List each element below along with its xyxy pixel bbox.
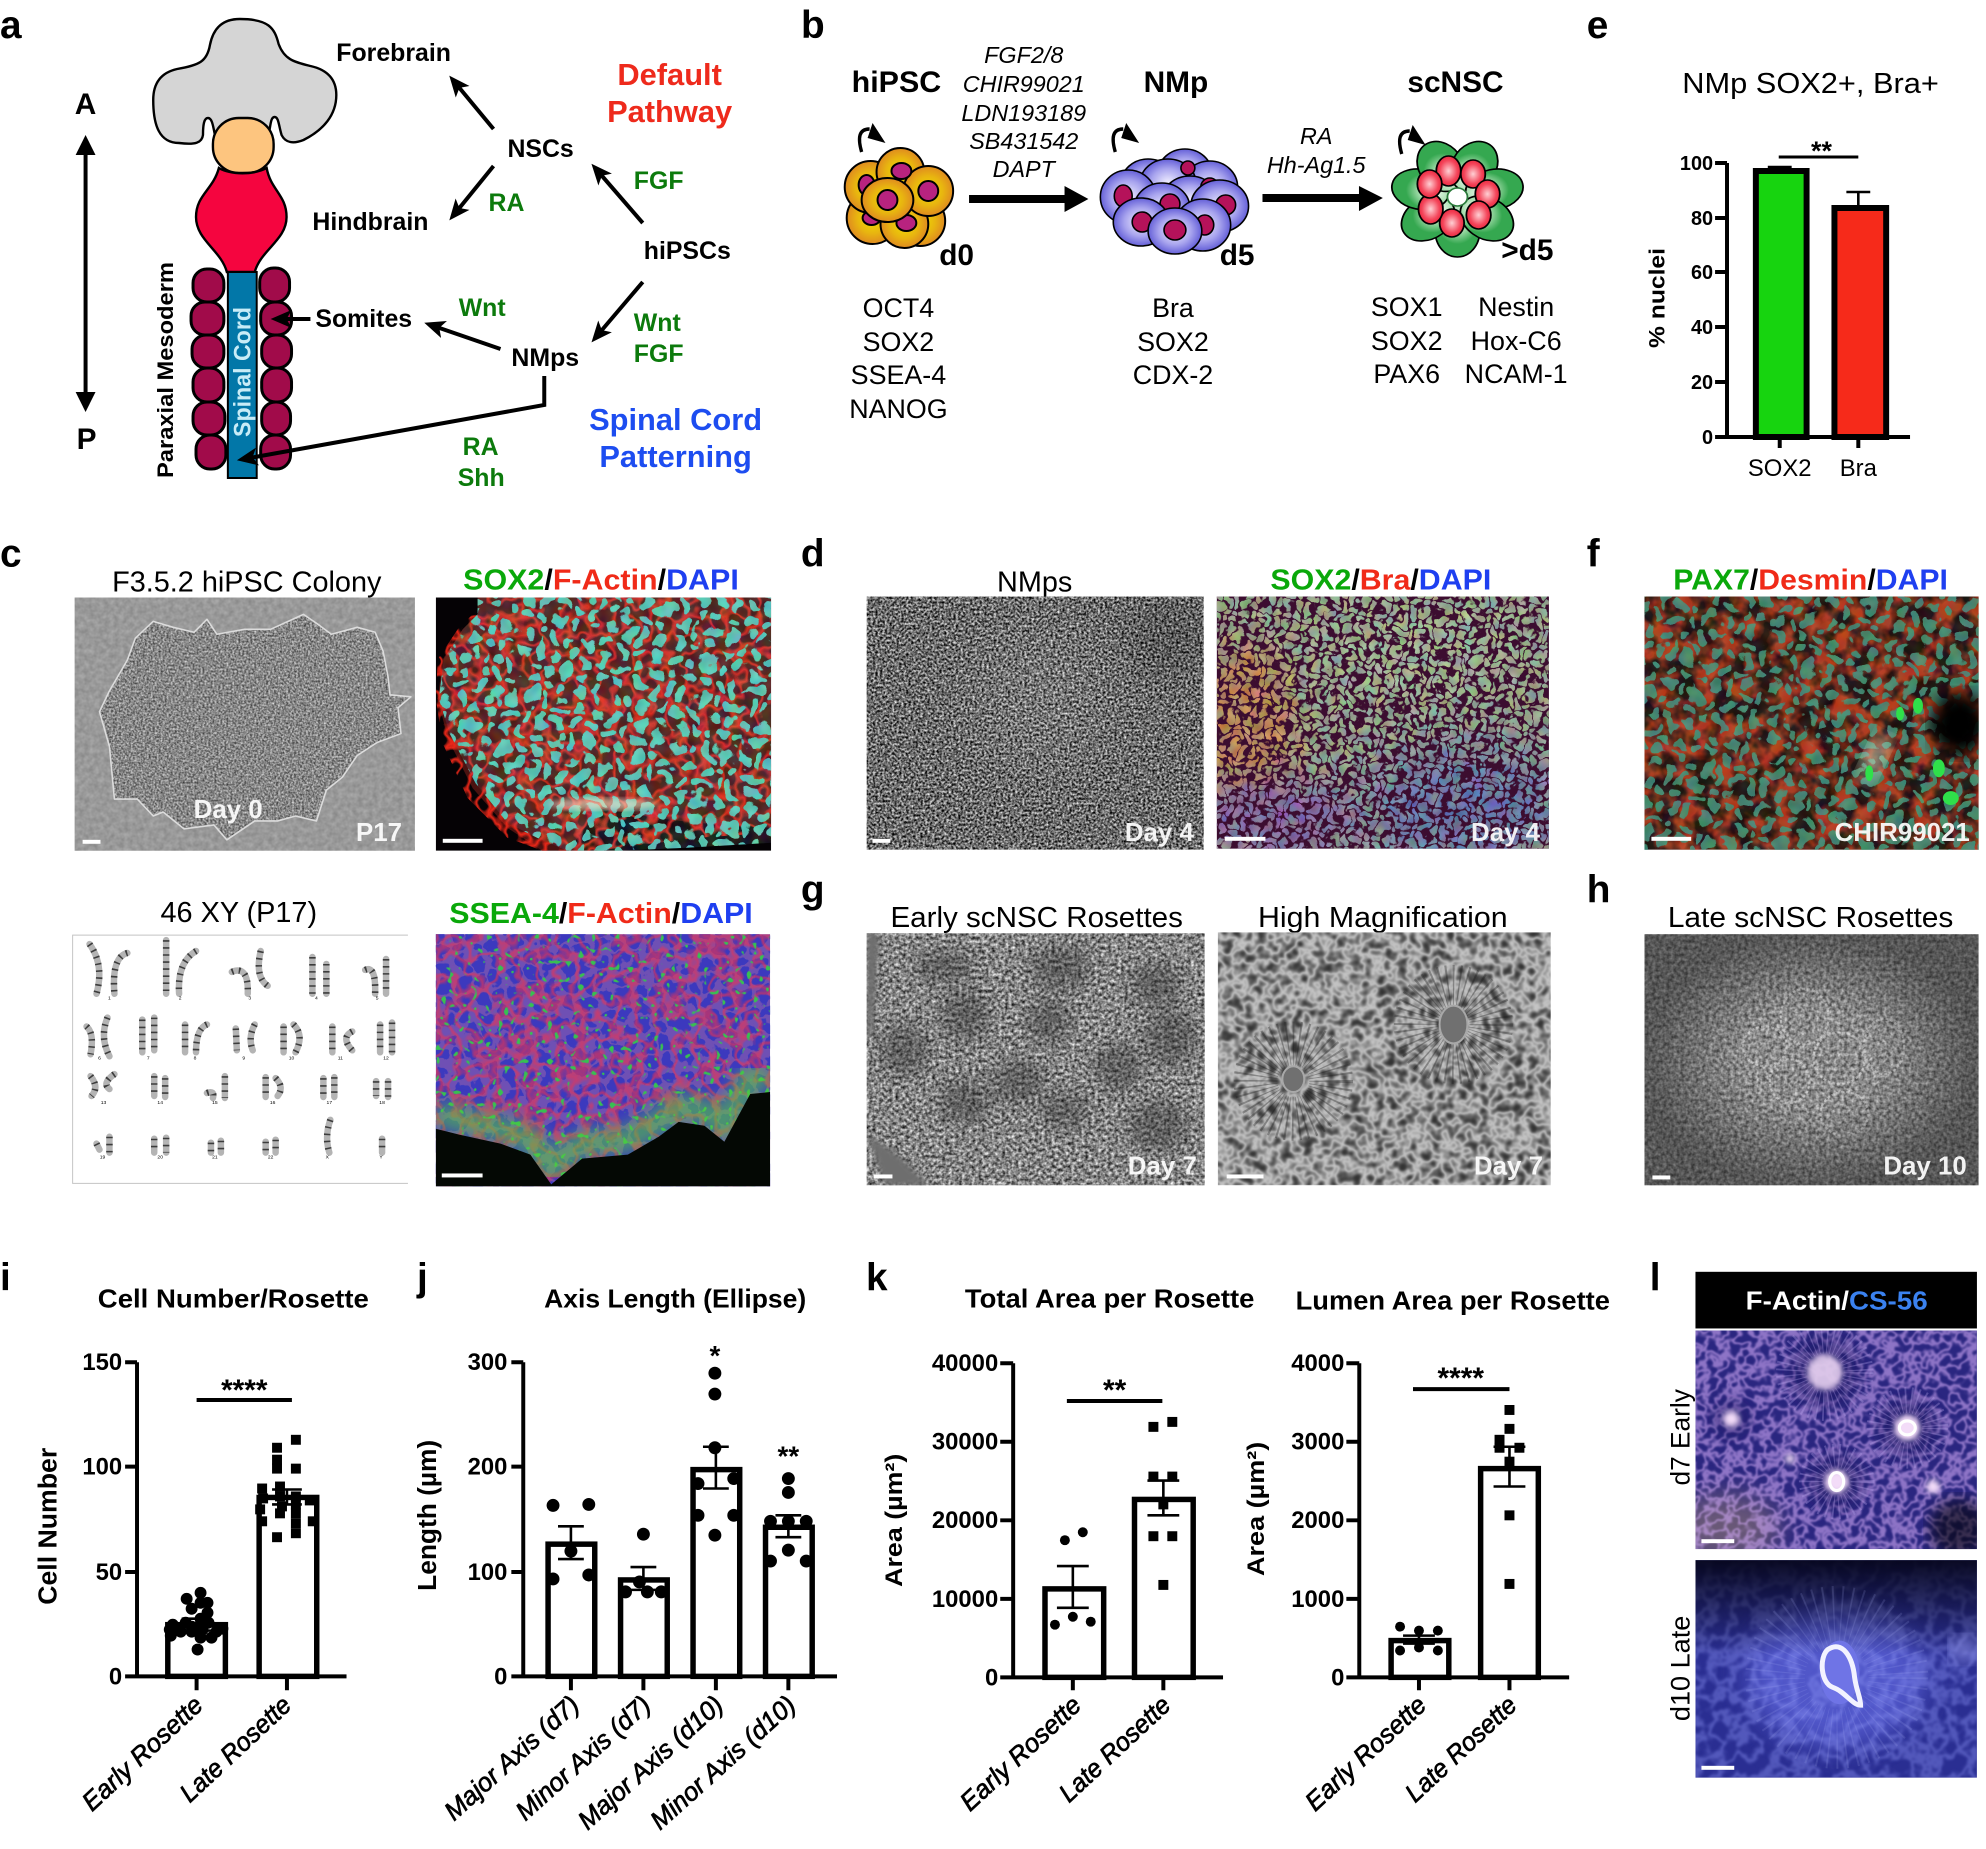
karyotype: 14 — [157, 1100, 163, 1106]
bars — [168, 1497, 317, 1676]
signal labels: RA — [463, 433, 499, 461]
y tick labels — [932, 1350, 998, 1691]
x labels: Early Rosette — [77, 1691, 209, 1817]
fluorescence photo: NMps: Day 4 — [1471, 819, 1541, 847]
karyotype: 11 — [338, 1055, 343, 1061]
karyotype: 6 — [98, 1055, 101, 1061]
phase contrast photo: NMps: Day 4 — [1125, 819, 1194, 847]
error bars — [558, 1447, 801, 1590]
NMp markers: SOX2 — [1137, 327, 1209, 357]
scNSC markers: SOX2 — [1371, 326, 1443, 356]
panel g: early rosettes — [801, 868, 1551, 1185]
signal labels — [458, 167, 684, 492]
fluorescence photo: SOX2 colony — [436, 598, 772, 851]
stage headings — [852, 66, 1504, 99]
y tick labels — [1680, 153, 1713, 449]
factors RA, Hh-Ag1.5: Hh-Ag1.5 — [1267, 152, 1367, 178]
phase contrast photo: high magnification — [1218, 932, 1551, 1185]
error bars — [1403, 1447, 1525, 1644]
bars — [548, 1470, 812, 1676]
arrow hiPSC to NMp — [969, 186, 1088, 212]
icon: self-renewal arrow d0 — [859, 123, 885, 152]
points — [547, 1367, 813, 1598]
y tick labels: 20000 — [932, 1507, 998, 1534]
heading: default pathway — [607, 57, 733, 129]
y tick labels: 100 — [82, 1454, 122, 1481]
y tick labels — [1291, 1350, 1344, 1691]
phase contrast photo: early rosettes — [867, 933, 1205, 1185]
node labels: Hindbrain — [312, 208, 428, 236]
y tick labels: 300 — [468, 1349, 507, 1376]
hiPSC markers: NANOG — [849, 394, 948, 424]
karyotype: 12 — [383, 1055, 389, 1061]
axes — [1000, 1363, 1223, 1690]
factors list: DAPT — [993, 156, 1057, 182]
icon: self-renewal arrow >d5 — [1400, 125, 1426, 154]
spinal cord: Spinal Cord — [230, 307, 257, 437]
day labels: d0 — [939, 239, 974, 272]
panel letter a: a — [0, 4, 22, 47]
fluorescence photo: CHIR99021: CHIR99021 — [1835, 819, 1970, 847]
y tick labels: 0 — [494, 1663, 507, 1690]
karyotype: 8 — [194, 1055, 197, 1061]
hiPSC markers: OCT4 — [863, 293, 934, 323]
y tick labels: 3000 — [1291, 1429, 1344, 1456]
y tick labels — [82, 1349, 122, 1690]
factors list — [961, 42, 1086, 182]
panel k: area charts — [866, 1257, 1610, 1817]
hiPSC markers: SOX2 — [863, 327, 934, 357]
karyotype: 18 — [379, 1100, 385, 1106]
node labels: hiPSCs — [644, 237, 731, 265]
heading: NMps: NMps — [997, 567, 1072, 599]
chart: lumen area per rosette — [1243, 1288, 1610, 1817]
heading: spinal cord patterning: Spinal Cord — [589, 402, 762, 437]
phase contrast colony photo — [75, 598, 415, 851]
panel letter g: g — [801, 868, 825, 911]
significance — [1067, 1374, 1162, 1407]
phase contrast photo: late rosettes — [1644, 934, 1979, 1185]
karyotype: Y — [379, 1155, 383, 1161]
chart title: Cell Number/Rosette — [98, 1286, 369, 1314]
karyotype: 15 — [212, 1100, 218, 1106]
spinal cord — [228, 272, 257, 478]
y tick labels: 10000 — [932, 1586, 998, 1613]
y tick labels: 150 — [82, 1349, 122, 1376]
axes — [511, 1362, 837, 1690]
fluorescence photo: d10 late — [1695, 1560, 1978, 1778]
header bar: F-Actin/ CS-56 — [1746, 1288, 1928, 1316]
panel l: immunofluorescence rosettes — [1650, 1257, 1986, 1778]
panel letter l: l — [1650, 1257, 1660, 1300]
signal labels: FGF — [634, 167, 684, 195]
panel e: bar chart of NMp nuclei — [1587, 4, 1939, 482]
scNSC markers — [1371, 292, 1568, 389]
y tick labels: 100 — [1680, 153, 1713, 175]
icon: hiPSC cluster — [845, 148, 953, 248]
axis arrow A to P: A — [75, 88, 96, 121]
x labels — [77, 1691, 297, 1817]
x labels: SOX2 — [1748, 455, 1812, 482]
panel letter b: b — [801, 4, 825, 47]
axes — [1346, 1363, 1569, 1690]
karyotype: 17 — [327, 1100, 332, 1106]
karyotype: 10 — [289, 1055, 295, 1061]
heading: SOX2/Bra/DAPI: SOX2/Bra/DAPI — [1270, 565, 1491, 597]
y tick labels: 60 — [1691, 262, 1713, 284]
significance: **** — [1438, 1362, 1484, 1395]
NMp markers — [1133, 293, 1213, 390]
karyotype: 5 — [376, 996, 379, 1002]
x labels: Late Rosette — [1400, 1691, 1523, 1808]
y tick labels: 1000 — [1291, 1586, 1344, 1613]
karyotype: 2 — [179, 996, 182, 1002]
fluorescence photo: d7 early — [1696, 1330, 1977, 1550]
node labels: NMps — [511, 344, 579, 372]
points — [1395, 1405, 1524, 1655]
chart: total area per rosette — [881, 1286, 1254, 1817]
panel letter h: h — [1587, 868, 1610, 911]
karyotype: X — [326, 1155, 330, 1161]
heading: spinal cord patterning: Patterning — [599, 439, 752, 474]
panel i: cell number chart — [0, 1257, 369, 1817]
x labels: Minor Axis (d10) — [645, 1691, 801, 1835]
y axis title: Area (µm²) — [1243, 1442, 1270, 1576]
heading: F3.5.2 colony: F3.5.2 hiPSC Colony — [112, 567, 382, 599]
day labels: d5 — [1220, 239, 1255, 272]
y tick labels: 30000 — [932, 1429, 998, 1456]
significance stars — [709, 1340, 799, 1472]
node labels: Somites — [315, 305, 412, 333]
y axis title: Length (µm) — [414, 1440, 442, 1591]
hiPSC markers — [849, 293, 948, 424]
NMp markers: Bra — [1152, 293, 1194, 323]
heading: PAX7/Desmin/DAPI: PAX7/Desmin/DAPI — [1673, 565, 1948, 597]
scNSC markers: NCAM-1 — [1465, 359, 1568, 389]
phase contrast colony photo: P17 — [356, 819, 402, 847]
significance — [197, 1374, 292, 1407]
day labels — [939, 234, 1553, 272]
error bars — [182, 1489, 302, 1631]
icon: forebrain — [153, 19, 336, 144]
y tick labels: 80 — [1691, 208, 1713, 230]
panel f: PAX7 image — [1587, 538, 1979, 850]
x labels: Minor Axis (d7) — [511, 1691, 656, 1826]
panel a: developmental pathway diagram — [0, 4, 762, 492]
d7 early label: d7 Early — [1665, 1389, 1695, 1486]
panel h: late rosettes — [1587, 868, 1979, 1185]
chart title: NMp SOX2+, Bra+ — [1682, 68, 1939, 100]
bars — [1045, 1499, 1193, 1677]
y tick labels — [468, 1349, 507, 1690]
factors list: LDN193189 — [961, 100, 1086, 126]
scNSC markers: Hox-C6 — [1471, 326, 1562, 356]
y tick labels: 0 — [1331, 1664, 1344, 1691]
error bars — [1057, 1481, 1179, 1608]
x labels — [1748, 455, 1878, 482]
bars — [1391, 1469, 1538, 1677]
factors list: SB431542 — [969, 128, 1078, 154]
karyotype: 3 — [248, 996, 251, 1002]
NMp markers: CDX-2 — [1133, 360, 1213, 390]
karyotype: 1 — [108, 996, 111, 1002]
x labels — [1300, 1691, 1523, 1817]
somite blocks — [191, 268, 292, 469]
panel b: differentiation scheme — [801, 4, 1568, 424]
x labels: Late Rosette — [1054, 1691, 1176, 1808]
y tick labels: 40 — [1691, 317, 1713, 339]
karyotype: 13 — [101, 1100, 106, 1106]
signal labels: Wnt — [459, 294, 506, 322]
y tick labels: 100 — [468, 1559, 507, 1586]
heading: SSEA-4/F-Actin/DAPI: SSEA-4/F-Actin/DAPI — [449, 898, 753, 930]
icon: NMp cluster — [1100, 149, 1249, 254]
header bar — [1695, 1272, 1977, 1328]
significance: ** — [1811, 136, 1832, 166]
significance stars: ** — [778, 1441, 799, 1472]
panel c: hiPSC images — [0, 533, 801, 1215]
node labels: NSCs — [507, 135, 574, 163]
signal labels: Shh — [458, 464, 505, 492]
x labels: Major Axis (d10) — [573, 1691, 729, 1835]
x labels: Bra — [1840, 455, 1878, 482]
early rosette points — [164, 1587, 228, 1655]
chart title: Axis Length (Ellipse) — [544, 1286, 806, 1314]
x labels — [439, 1691, 801, 1835]
icon: hindbrain — [196, 168, 287, 272]
heading: late rosettes: Late scNSC Rosettes — [1668, 902, 1953, 934]
panel letter k: k — [866, 1257, 888, 1300]
axis arrow A to P: P — [77, 423, 97, 456]
y tick labels: 20 — [1691, 372, 1713, 394]
fluorescence photo: CHIR99021 — [1644, 596, 1979, 850]
karyotype: 21 — [212, 1155, 218, 1161]
paraxial mesoderm label: Paraxial Mesoderm — [153, 262, 178, 478]
icon: scNSC rosette — [1387, 134, 1528, 257]
panel letter d: d — [801, 533, 825, 576]
d10 late label: d10 Late — [1665, 1616, 1695, 1721]
stage headings: hiPSC — [852, 66, 941, 99]
y tick labels: 0 — [109, 1663, 122, 1690]
phase contrast photo: NMps — [867, 597, 1208, 850]
y tick labels: 2000 — [1291, 1507, 1344, 1534]
heading: default pathway: Pathway — [607, 94, 733, 129]
x labels: Early Rosette — [955, 1691, 1087, 1817]
factors RA, Hh-Ag1.5: RA — [1300, 123, 1332, 149]
scNSC markers: PAX6 — [1373, 359, 1440, 389]
hiPSC markers: SSEA-4 — [851, 360, 946, 390]
factors list: FGF2/8 — [984, 42, 1063, 68]
factors RA, Hh-Ag1.5 — [1267, 123, 1367, 178]
x labels: Major Axis (d7) — [439, 1691, 585, 1826]
y tick labels: 4000 — [1291, 1350, 1344, 1377]
heading: 46 XY: 46 XY (P17) — [161, 897, 317, 929]
heading: default pathway: Default — [617, 57, 722, 92]
fluorescence photo: SSEA-4 colony — [436, 934, 770, 1186]
karyotype: 16 — [270, 1100, 276, 1106]
karyotype — [73, 935, 408, 1183]
axis arrow A to P — [75, 88, 97, 456]
axes — [125, 1362, 347, 1690]
x labels: Early Rosette — [1300, 1691, 1432, 1817]
factors list: CHIR99021 — [963, 71, 1085, 97]
panel letter i: i — [0, 1257, 11, 1300]
y tick labels: 0 — [1702, 427, 1713, 449]
icon: self-renewal arrow d5 — [1113, 123, 1139, 152]
panel letter e: e — [1587, 4, 1608, 47]
points — [1050, 1417, 1177, 1630]
significance — [1779, 136, 1858, 166]
stage headings: scNSC — [1407, 66, 1504, 99]
icon: midbrain — [213, 118, 274, 173]
pathway arrows — [244, 81, 643, 459]
phase contrast photo: high magnification: Day 7 — [1474, 1152, 1543, 1180]
signal labels: RA — [489, 189, 524, 217]
phase contrast colony photo: Day 0 — [194, 796, 263, 824]
stage headings: NMp — [1144, 66, 1208, 99]
panel letter c: c — [0, 533, 22, 576]
signal labels: FGF — [634, 340, 684, 368]
late rosette points — [255, 1435, 318, 1542]
axes — [1715, 163, 1910, 448]
heading: spinal cord patterning — [589, 402, 762, 474]
panel j: axis length chart — [414, 1257, 837, 1835]
significance: ** — [1103, 1374, 1127, 1407]
chart title: Total Area per Rosette — [965, 1286, 1254, 1314]
phase contrast photo: early rosettes: Day 7 — [1128, 1152, 1197, 1180]
y axis title: Cell Number — [35, 1448, 63, 1605]
scNSC markers: SOX1 — [1371, 292, 1443, 322]
chart title: Lumen Area per Rosette — [1296, 1288, 1610, 1316]
node labels — [312, 39, 731, 372]
karyotype: 19 — [100, 1155, 105, 1161]
bars — [1756, 171, 1886, 437]
node labels: Forebrain — [336, 39, 451, 67]
arrow NMp to scNSC — [1262, 186, 1383, 211]
signal labels: Wnt — [634, 309, 681, 337]
y tick labels: 200 — [468, 1454, 507, 1481]
karyotype: 20 — [157, 1155, 163, 1161]
phase contrast photo: late rosettes: Day 10 — [1883, 1152, 1967, 1180]
significance: **** — [221, 1374, 268, 1407]
significance — [1413, 1362, 1509, 1395]
scNSC markers: Nestin — [1478, 292, 1554, 322]
heading: high magnification: High Magnification — [1258, 902, 1508, 934]
y tick labels: 50 — [96, 1559, 122, 1586]
day labels: >d5 — [1501, 234, 1553, 267]
karyotype: 7 — [147, 1055, 150, 1061]
karyotype: 4 — [315, 996, 318, 1002]
heading: early rosettes: Early scNSC Rosettes — [890, 902, 1183, 934]
panel letter f: f — [1587, 533, 1600, 576]
karyotype: 22 — [268, 1155, 274, 1161]
x labels: Late Rosette — [175, 1691, 297, 1808]
y axis title: % nuclei — [1644, 248, 1669, 348]
y tick labels: 0 — [985, 1664, 998, 1691]
karyotype: 9 — [242, 1055, 245, 1061]
panel letter j: j — [416, 1257, 428, 1300]
y tick labels: 40000 — [932, 1350, 998, 1377]
x labels — [955, 1691, 1176, 1817]
fluorescence photo: NMps — [1216, 596, 1549, 849]
y axis title: Area (µm²) — [881, 1454, 908, 1587]
error bars — [1768, 167, 1870, 206]
significance stars: * — [709, 1340, 720, 1371]
heading: SOX2/F-Actin/DAPI: SOX2/F-Actin/DAPI — [463, 565, 739, 597]
panel d: NMp images — [802, 538, 1549, 850]
